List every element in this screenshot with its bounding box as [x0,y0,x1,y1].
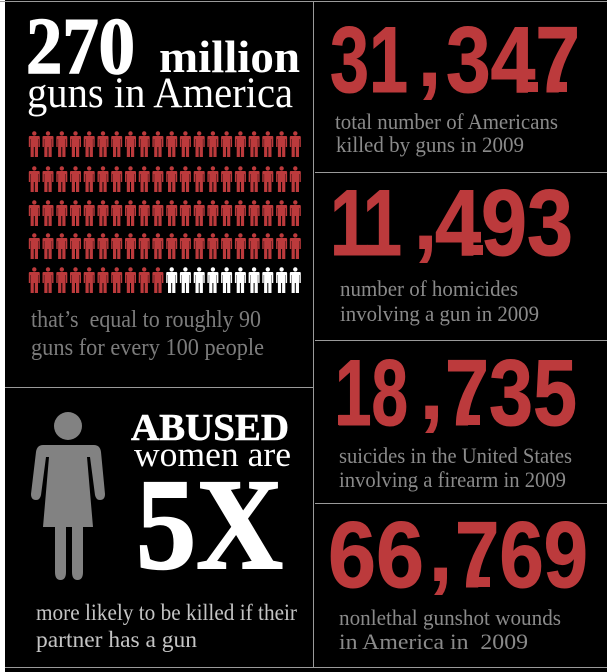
stat: 18,735: suicides in the United States [339,443,572,468]
pictogram: 100 people, 90 red and 10 white [29,131,301,293]
stat: 31,347: 31 [330,7,408,112]
stat: 66,769: , [428,501,453,601]
stat: 18,735: , [419,339,444,439]
stat: 11,493: involving a gun in 2009 [340,301,539,326]
stat: 11,493: , [413,169,438,269]
text: more likely to be killed [36,600,297,652]
stat: 11,493: 493 [435,170,573,275]
stat: 31,347: killed by guns in 2009 [336,132,524,157]
stat: 66,769: in America in 2009 [339,629,528,654]
stat: 18,735: 18 [335,340,408,445]
stat: 18,735: 735 [445,340,577,445]
title: 270 million guns in America [26,3,300,117]
text: more likely to be killed: partner has a gun [36,627,198,652]
heading: abused women are 5X: ABUSED [131,407,289,449]
heading: abused women are 5X: 5X [136,453,283,597]
heading: abused women are 5X: women are [134,435,291,474]
title: 270 million guns in America: guns in America [27,70,293,117]
text: equal to roughly 90 guns per 100 people [31,307,264,361]
stat: 31,347: 347 [446,7,580,112]
text: more likely to be killed: more likely to be killed if their [36,600,297,625]
stat: 18,735 [335,339,577,492]
title: 270 million guns in America: 270 [26,3,135,91]
stat: 18,735: involving a firearm in 2009 [339,467,566,492]
text: equal to roughly 90 guns per 100 people: that’s equal to roughly 90 [31,307,261,333]
icon: woman figure [31,412,105,580]
stat: 11,493: number of homicides [340,276,518,301]
stat: 31,347: , [417,6,442,106]
title: 270 million guns in America: million [159,32,300,82]
stat: 66,769 [328,501,588,654]
stat: 31,347 [330,6,580,157]
stat: 11,493 [330,169,573,326]
text: equal to roughly 90 guns per 100 people: guns for every 100 people [31,335,264,361]
stat: 66,769: nonlethal gunshot wounds [339,605,561,630]
stat: 11,493: 11 [330,170,402,275]
stat: 31,347: total number of Americans [335,109,558,134]
stat: 66,769: 66 [328,502,424,607]
